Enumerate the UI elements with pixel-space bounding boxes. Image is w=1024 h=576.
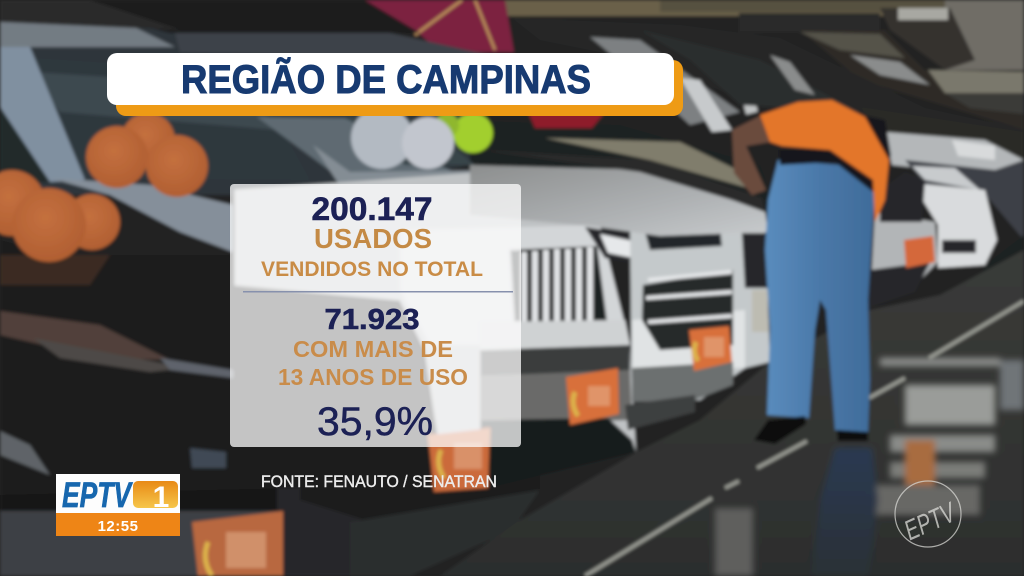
translucent panel background bbox=[230, 184, 521, 447]
dark left hood bbox=[0, 240, 540, 576]
person leaning on car bbox=[732, 100, 891, 444]
watermark: EPTV: EPTV bbox=[900, 496, 961, 546]
balloons bbox=[0, 107, 493, 262]
older cars label line 1: COM MAIS DE bbox=[293, 336, 453, 362]
silver hoods bbox=[470, 165, 768, 236]
used label: USADOS bbox=[314, 223, 432, 254]
far cars bbox=[739, 8, 1024, 130]
rear white cars bbox=[868, 132, 1024, 308]
left car upper bbox=[0, 0, 512, 252]
title banner bbox=[107, 53, 683, 116]
logo: EPTV 1 with clock bbox=[56, 474, 180, 536]
floor reflections bbox=[715, 358, 1024, 576]
watermark: EPTV bbox=[895, 481, 961, 547]
banner white plate bbox=[107, 53, 674, 105]
data panel bbox=[230, 184, 521, 447]
back wall bbox=[500, 0, 1024, 16]
central jeep suv bbox=[235, 170, 649, 490]
banner orange shadow bbox=[116, 60, 683, 116]
total number: 200.147 bbox=[312, 191, 432, 227]
magenta decoration bbox=[362, 0, 514, 52]
floor bbox=[440, 250, 1024, 576]
orange plates bbox=[192, 236, 935, 576]
logo: EPTV 1 with clock: 12:55 bbox=[98, 518, 138, 535]
logo: EPTV 1 with clock: 1 bbox=[153, 481, 169, 514]
roofs and windscreen row bbox=[512, 18, 1024, 160]
source credit: FONTE: FENAUTO / SENATRAN bbox=[261, 473, 497, 491]
title text: REGIÃO DE CAMPINAS bbox=[181, 56, 591, 102]
older cars label line 2: 13 ANOS DE USO bbox=[278, 364, 468, 390]
dark band above hoods bbox=[440, 120, 780, 215]
second silver suv bbox=[625, 225, 770, 430]
logo: EPTV 1 with clock: EPTV bbox=[62, 476, 133, 515]
percentage: 35,9% bbox=[317, 400, 433, 444]
sold total label: VENDIDOS NO TOTAL bbox=[261, 258, 483, 281]
older cars number: 71.923 bbox=[324, 304, 420, 336]
floor lane lines bbox=[585, 301, 1024, 576]
